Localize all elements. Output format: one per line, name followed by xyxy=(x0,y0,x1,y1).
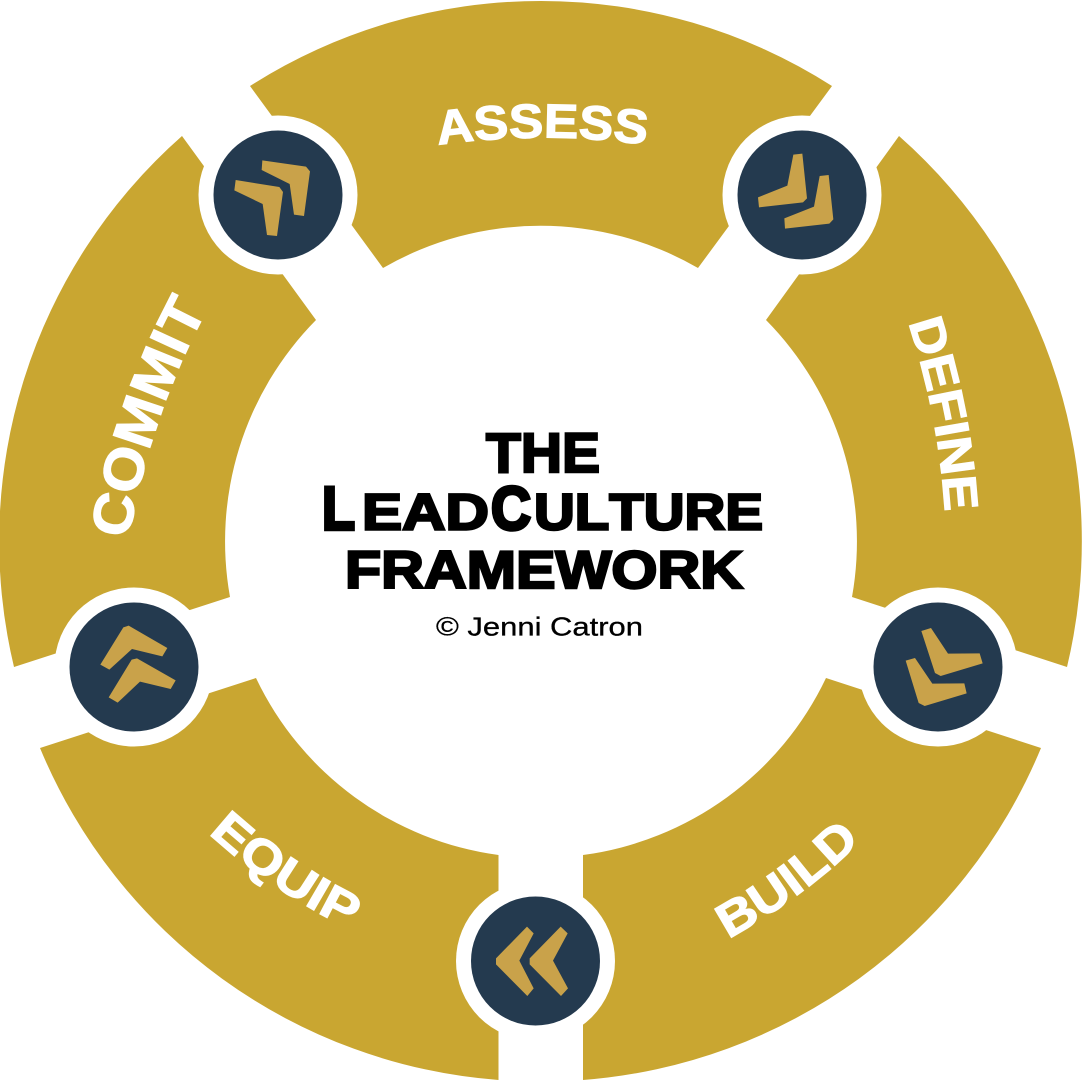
icon: top-left chevron badge xyxy=(198,116,358,274)
title: the leadculture framework: EAD xyxy=(362,484,489,540)
credit: copyright line: © Jenni Catron xyxy=(436,612,643,642)
label: build: BUILD xyxy=(714,824,854,938)
panel: define segment xyxy=(766,136,1082,667)
title: the leadculture framework: L xyxy=(322,474,355,542)
icon: bottom chevron badge xyxy=(456,882,615,1040)
label: assess: ASSESS xyxy=(438,104,648,146)
icon: right chevron badge xyxy=(858,588,1018,746)
title: the leadculture framework: THE xyxy=(486,421,600,484)
panel: build segment xyxy=(583,678,1041,1080)
title: the leadculture framework: ULTURE xyxy=(534,484,763,540)
panel: assess segment xyxy=(250,1,832,268)
panel: commit segment xyxy=(0,136,316,667)
label: equip: EQUIP xyxy=(210,810,360,918)
label: commit: COMMIT xyxy=(93,292,202,534)
panel: equip segment xyxy=(40,678,498,1080)
label: define: DEFINE xyxy=(908,316,978,510)
title: the leadculture framework: FRAMEWORK xyxy=(345,541,743,600)
icon: left chevron badge xyxy=(54,588,214,746)
title: the leadculture framework xyxy=(322,421,763,600)
icon: top-right chevron badge xyxy=(722,116,882,274)
title: the leadculture framework: C xyxy=(491,474,531,542)
